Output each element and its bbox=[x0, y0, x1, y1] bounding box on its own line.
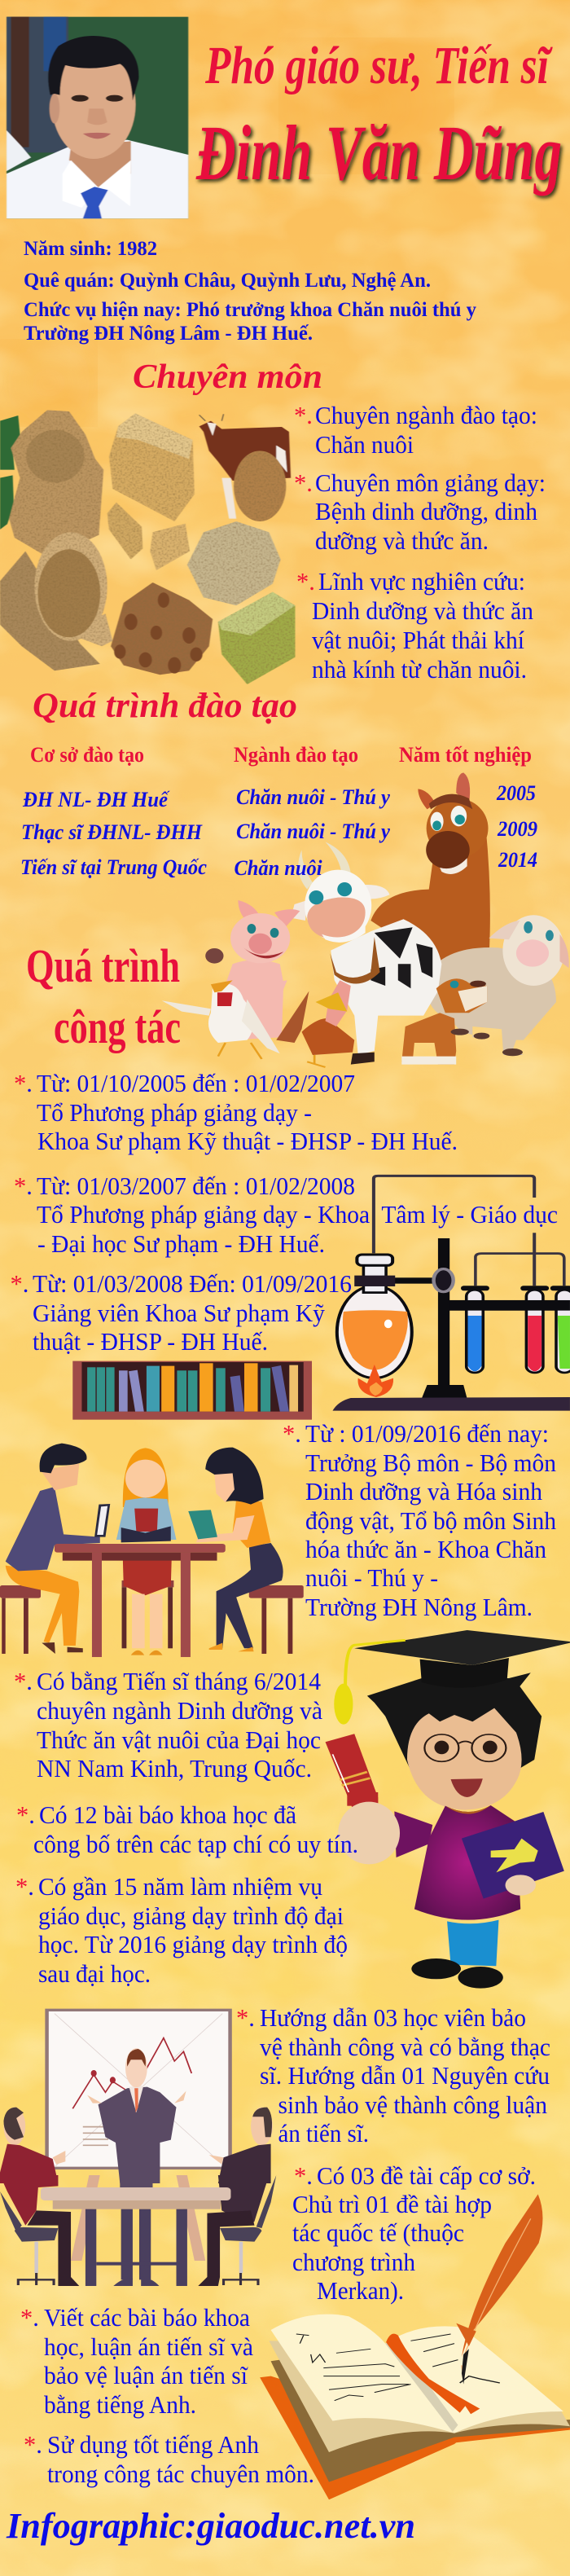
closing list: bằng tiếng Anh. bbox=[44, 2391, 196, 2419]
illustration: chemistry lab bbox=[332, 1176, 570, 1411]
expertise list: *. bbox=[294, 402, 313, 429]
training table: Chăn nuôi - Thú y bbox=[236, 785, 390, 809]
supervision and projects list: *. bbox=[236, 2004, 255, 2032]
achievements list bbox=[14, 1668, 358, 1988]
supervision and projects list: chương trình bbox=[292, 2249, 415, 2276]
closing list: *. bbox=[24, 2431, 42, 2459]
training table: Cơ sở đào tạo bbox=[30, 743, 144, 767]
illustration: graduate with diploma bbox=[326, 1630, 570, 1989]
expertise list: vật nuôi; Phát thải khí bbox=[312, 626, 524, 654]
work history list: part two: nuôi - Thú y - bbox=[305, 1564, 438, 1592]
achievements list: *. bbox=[16, 1801, 35, 1829]
work history list: part one: Tổ Phương pháp giảng dạy - bbox=[37, 1099, 312, 1127]
heading: training: Quá trình đào tạo bbox=[33, 687, 297, 725]
work history list: part two: động vật, Tổ bộ môn Sinh bbox=[305, 1507, 556, 1535]
closing list: *. bbox=[20, 2304, 39, 2332]
supervision and projects list: sĩ. Hướng dẫn 01 Nguyên cứu bbox=[260, 2062, 550, 2090]
achievements list: học. Từ 2016 giảng dạy trình độ bbox=[38, 1931, 348, 1958]
expertise list: Chuyên môn giảng dạy: bbox=[315, 469, 546, 497]
work history list: part one: Từ: 01/03/2008 Đến: 01/09/2016 bbox=[33, 1270, 352, 1298]
supervision and projects list: Merkan). bbox=[317, 2277, 404, 2305]
work history list: part two: Dinh dưỡng và Hóa sinh bbox=[305, 1478, 542, 1506]
achievements list: *. bbox=[14, 1668, 33, 1695]
work history list: part one: Giảng viên Khoa Sư phạm Kỹ bbox=[33, 1299, 326, 1327]
achievements list: Thức ăn vật nuôi của Đại học bbox=[37, 1726, 321, 1754]
work history list: part two bbox=[283, 1420, 556, 1621]
work history list: part two: hóa thức ăn - Khoa Chăn bbox=[305, 1536, 546, 1563]
work history list: part one: Từ: 01/10/2005 đến : 01/02/2007 bbox=[37, 1070, 355, 1097]
work history list: part one: *. bbox=[14, 1172, 33, 1200]
heading: expertise: Chuyên môn bbox=[133, 358, 322, 396]
work history list: part two: Từ : 01/09/2016 đến nay: bbox=[305, 1420, 549, 1448]
portrait photo bbox=[7, 17, 188, 218]
personal info: Trường ĐH Nông Lâm - ĐH Huế. bbox=[24, 323, 313, 345]
achievements list: Có gần 15 năm làm nhiệm vụ bbox=[38, 1873, 322, 1901]
supervision and projects list: Có 03 đề tài cấp cơ sở. bbox=[317, 2162, 536, 2190]
expertise list bbox=[294, 402, 546, 684]
work history list: part one: - Đại học Sư phạm - ĐH Huế. bbox=[37, 1230, 325, 1258]
personal info: Chức vụ hiện nay: Phó trưởng khoa Chăn nuôi thú y bbox=[24, 299, 476, 321]
closing list: trong công tác chuyên môn. bbox=[47, 2460, 314, 2488]
achievements list: chuyên ngành Dinh dưỡng và bbox=[37, 1697, 322, 1725]
closing list: Viết các bài báo khoa bbox=[44, 2304, 250, 2332]
closing list bbox=[20, 2304, 314, 2488]
expertise list: *. bbox=[296, 568, 315, 596]
expertise list: Chăn nuôi bbox=[315, 431, 414, 459]
achievements list: NN Nam Kinh, Trung Quốc. bbox=[37, 1755, 312, 1783]
work history list: part one: *. bbox=[10, 1270, 28, 1298]
expertise list: Bệnh dinh dưỡng, dinh bbox=[315, 498, 537, 525]
training table: ĐH NL- ĐH Huế bbox=[22, 788, 170, 811]
training table bbox=[20, 743, 537, 880]
achievements list: công bố trên các tạp chí có uy tín. bbox=[33, 1831, 358, 1858]
achievements list: Có bằng Tiến sĩ tháng 6/2014 bbox=[37, 1668, 321, 1695]
achievements list: *. bbox=[15, 1873, 34, 1901]
supervision and projects list: án tiến sĩ. bbox=[278, 2120, 369, 2147]
achievements list: giáo dục, giảng dạy trình độ đại bbox=[38, 1902, 344, 1930]
expertise list: dưỡng và thức ăn. bbox=[315, 527, 489, 555]
expertise list: Dinh dưỡng và thức ăn bbox=[312, 597, 533, 625]
training table: Tiến sĩ tại Trung Quốc bbox=[20, 855, 207, 879]
training table: Thạc sĩ ĐHNL- ĐHH bbox=[21, 820, 203, 844]
supervision and projects list: Hướng dẫn 03 học viên bảo bbox=[260, 2004, 526, 2032]
training table: Ngành đào tạo bbox=[234, 743, 358, 767]
footer credit: Infographic:giaoduc.net.vn bbox=[6, 2506, 415, 2546]
work history list: part one: *. bbox=[14, 1070, 33, 1097]
achievements list: Có 12 bài báo khoa học đã bbox=[39, 1801, 296, 1829]
work history list: part one: Từ: 01/03/2007 đến : 01/02/2008 bbox=[37, 1172, 355, 1200]
expertise list: Lĩnh vực nghiên cứu: bbox=[318, 568, 525, 596]
work history list: part two: *. bbox=[283, 1420, 301, 1448]
supervision and projects list: sinh bảo vệ thành công luận bbox=[278, 2091, 547, 2119]
work history list: part one: thuật - ĐHSP - ĐH Huế. bbox=[33, 1328, 268, 1356]
closing list: Sử dụng tốt tiếng Anh bbox=[47, 2431, 259, 2459]
closing list: bảo vệ luận án tiến sĩ bbox=[44, 2362, 248, 2389]
illustration: three students reading at a table bbox=[0, 1444, 304, 1657]
training table: Năm tốt nghiệp bbox=[399, 743, 532, 767]
personal info: Quê quán: Quỳnh Châu, Quỳnh Lưu, Nghệ An. bbox=[24, 270, 431, 292]
training table: 2014 bbox=[498, 848, 537, 872]
work history list: part one: Tổ Phương pháp giảng dạy - Khoa Tâm lý - Giáo dục bbox=[37, 1201, 558, 1229]
heading: work history bbox=[26, 939, 181, 1053]
expertise list: Chuyên ngành đào tạo: bbox=[315, 402, 537, 429]
training table: 2005 bbox=[496, 781, 536, 805]
heading: work history: Quá trình bbox=[26, 939, 180, 992]
supervision and projects list: vệ thành công và có bằng thạc bbox=[260, 2033, 550, 2061]
expertise list: nhà kính từ chăn nuôi. bbox=[312, 656, 527, 684]
illustration: open book and quill bbox=[260, 2194, 570, 2499]
achievements list: sau đại học. bbox=[38, 1960, 151, 1988]
training table: Chăn nuôi bbox=[235, 856, 322, 880]
illustration: business presentation bbox=[0, 2010, 276, 2286]
supervision and projects list: tác quốc tế (thuộc bbox=[292, 2219, 464, 2247]
personal info bbox=[24, 238, 476, 345]
training table: Chăn nuôi - Thú y bbox=[236, 820, 390, 843]
supervision and projects list: *. bbox=[294, 2162, 313, 2190]
heading: work history: công tác bbox=[54, 1000, 181, 1053]
training table: 2009 bbox=[497, 817, 537, 841]
expertise list: *. bbox=[294, 469, 313, 497]
work history list: part two: Trưởng Bộ môn - Bộ môn bbox=[305, 1449, 556, 1477]
work history list: part one: Khoa Sư phạm Kỹ thuật - ĐHSP - ĐH Huế. bbox=[37, 1128, 458, 1155]
supervision and projects list: Chủ trì 01 đề tài hợp bbox=[292, 2191, 492, 2218]
closing list: học, luận án tiến sĩ và bbox=[44, 2333, 253, 2361]
work history list: part one bbox=[10, 1070, 558, 1356]
work history list: part two: Trường ĐH Nông Lâm. bbox=[305, 1594, 533, 1621]
illustration: animal feed collage bbox=[0, 410, 295, 684]
supervision and projects list bbox=[236, 2004, 550, 2305]
illustration: cartoon farm animals bbox=[162, 772, 569, 1067]
personal info: Năm sinh: 1982 bbox=[24, 238, 157, 260]
illustration: bookshelf bbox=[72, 1361, 312, 1420]
